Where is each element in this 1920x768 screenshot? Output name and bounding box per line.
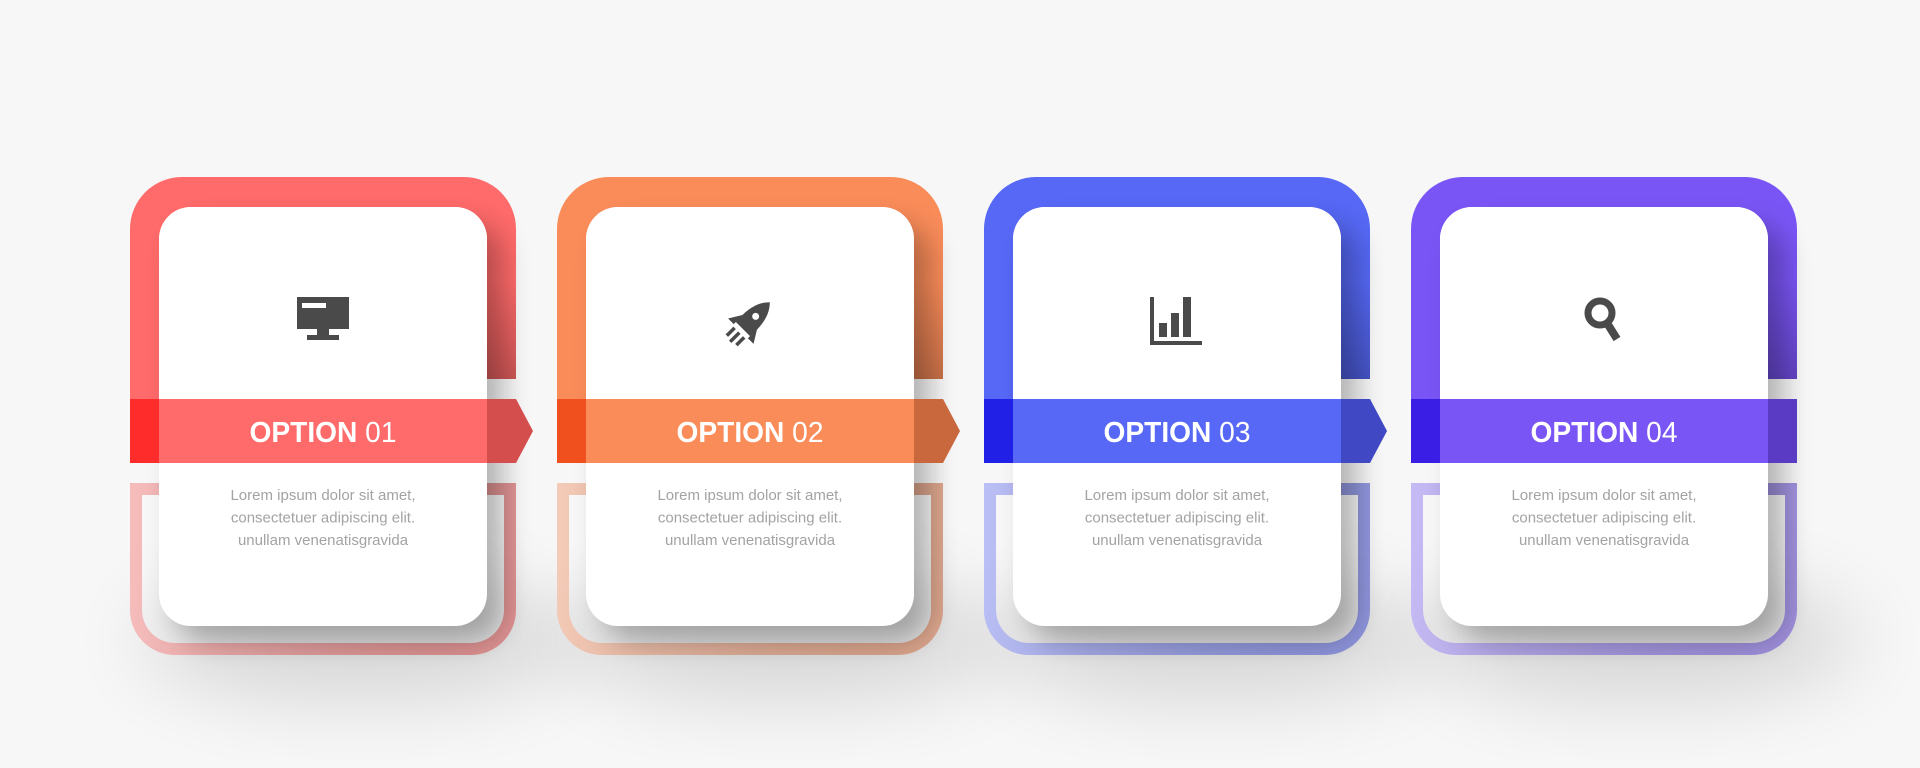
text: option 04 description: unullam venenatisgravida: [1519, 532, 1690, 549]
icon: rocket: [717, 289, 783, 355]
banner: option 02: [557, 399, 960, 463]
text: option 01 description: Lorem ipsum dolor sit amet,: [230, 487, 416, 504]
text: option 04 description: Lorem ipsum dolor sit amet,: [1511, 487, 1697, 504]
banner: option 01: OPTION 01: [250, 417, 396, 449]
panel: option 02: [557, 177, 1007, 700]
icon: magnifier: [1588, 301, 1617, 339]
text: option 03 description: unullam venenatisgravida: [1092, 532, 1263, 549]
text: option 02 description: unullam venenatisgravida: [665, 532, 836, 549]
panel: option 04: [1411, 177, 1861, 700]
banner: option 03: OPTION 03: [1104, 417, 1250, 449]
panel: option 01: [130, 177, 580, 700]
icon: bar chart: [1150, 297, 1202, 345]
text: option 01 description: unullam venenatisgravida: [238, 532, 409, 549]
text: option 01 description: consectetuer adipiscing elit.: [231, 510, 415, 526]
text: option 03 description: Lorem ipsum dolor sit amet,: [1084, 487, 1270, 504]
text: option 03 description: consectetuer adipiscing elit.: [1085, 510, 1269, 526]
banner: option 04: OPTION 04: [1530, 417, 1678, 449]
text: option 02 description: consectetuer adipiscing elit.: [658, 510, 842, 526]
banner: option 03: [984, 399, 1387, 463]
banner: option 04: [1411, 399, 1797, 463]
banner: option 01: [130, 399, 533, 463]
panel: option 03: [984, 177, 1434, 700]
icon: monitor: [297, 297, 349, 340]
banner: option 02: OPTION 02: [676, 417, 824, 449]
text: option 04 description: consectetuer adipiscing elit.: [1512, 510, 1696, 526]
text: option 02 description: Lorem ipsum dolor sit amet,: [657, 487, 843, 504]
